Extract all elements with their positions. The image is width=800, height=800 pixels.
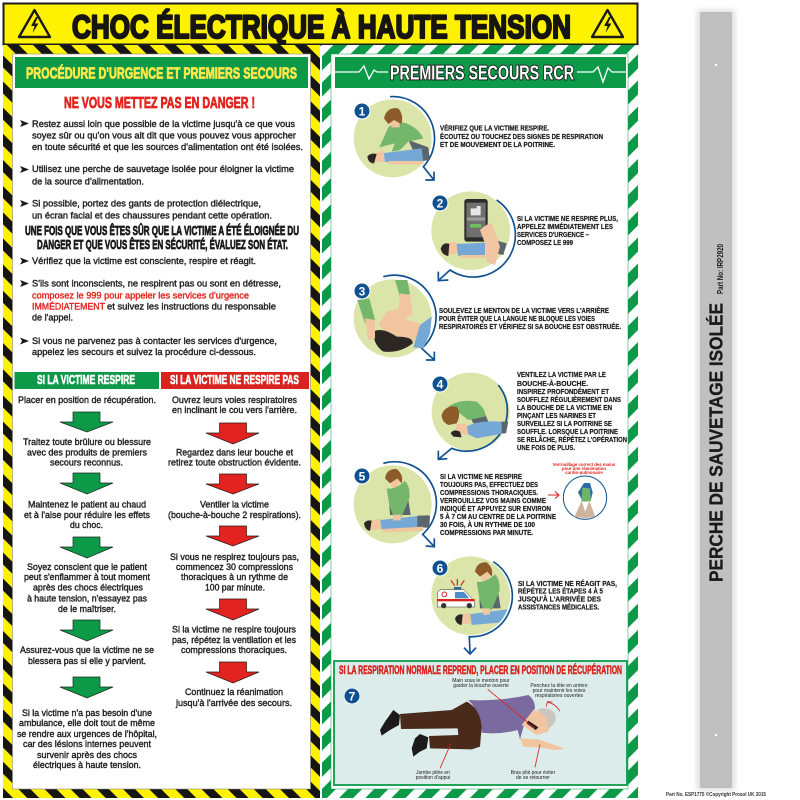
bullet list: assessment: de l'appel. <box>32 313 73 323</box>
steps text: breathing: avec des produits de premiers <box>27 448 147 458</box>
text 5 <box>440 472 556 537</box>
text 4: SE RELÂCHE, RÉPÉTEZ L'OPÉRATION <box>517 435 627 444</box>
callouts: de se retourner <box>516 775 550 781</box>
icon: right electrical warning triangle <box>592 10 623 37</box>
text 3: SOULEVEZ LE MENTON DE LA VICTIME VERS L'ARRIÈRE <box>439 306 609 315</box>
steps text: breathing: Traitez toute brûlure ou blessure <box>23 437 151 447</box>
steps text: breathing: secours reconnus. <box>50 458 123 468</box>
step 3 <box>354 275 621 360</box>
steps text: breathing: Maintenez le patient au chaud <box>28 500 146 510</box>
step 5 <box>354 462 616 547</box>
assessment heading <box>25 223 299 252</box>
step 7: recovery position <box>334 661 627 785</box>
bullet list: assessment: IMMÉDIATEMENT <box>32 301 105 311</box>
text 6: RÉPÉTEZ LES ÉTAPES 4 À 5 <box>518 586 603 596</box>
text 2: SERVICES D'URGENCE – <box>517 230 589 239</box>
step 1 <box>354 97 603 180</box>
arrows: red flow <box>206 423 259 683</box>
badge 1 <box>354 103 370 119</box>
text 2: COMPOSEZ LE 999 <box>517 238 573 247</box>
tab: not breathing <box>161 372 309 389</box>
steps text: not breathing: thoraciques à un rythme de <box>181 572 288 582</box>
text 6: JUSQU'À L'ARRIVÉE DES <box>518 594 601 604</box>
steps text: breathing <box>17 395 157 770</box>
inset caption: pour une réanimation <box>562 466 606 471</box>
steps text: breathing: Soyez conscient que le patient <box>27 562 147 572</box>
illustration: recovery position <box>380 689 564 768</box>
panel: emergency procedure <box>3 45 320 798</box>
bullet list: assessment: Vérifiez que la victime est consciente, respire et réagit. <box>32 256 256 266</box>
text 6: ASSISTANCES MÉDICALES. <box>518 602 599 612</box>
badge 7: 7 <box>349 689 356 703</box>
bullet list: assessment: Si vous ne parvenez pas à contacter les services d'urgence, <box>32 336 277 346</box>
steps text: breathing: du choc. <box>70 520 103 530</box>
badge 1: 1 <box>359 104 366 118</box>
steps text: not breathing: jusqu'à l'arrivée des secours. <box>175 698 292 708</box>
text 2: APPELEZ IMMÉDIATEMENT LES <box>517 222 613 231</box>
text 5: COMPRESSIONS PAR MINUTE. <box>440 528 533 537</box>
insulated pole strip <box>697 10 735 790</box>
step 4 <box>432 370 627 459</box>
text 4: VENTILEZ LA VICTIME PAR LE <box>517 370 606 379</box>
callouts: garder la bouche ouverte <box>453 683 509 689</box>
panel: CPR first aid <box>322 45 638 798</box>
bullet list: first steps: Utilisez une perche de sauvetage isolée pour éloigner la victime <box>32 164 294 174</box>
steps text: breathing: et à l'aise pour réduire les effets <box>24 510 150 520</box>
text 4: INSPIREZ PROFONDÉMENT ET <box>517 387 610 396</box>
badge 5: 5 <box>359 469 366 483</box>
bullet list: first steps: Si possible, portez des gants de protection diélectrique, <box>32 199 261 209</box>
pole part number: Part No: IRP2920 <box>715 244 725 294</box>
bullet list: first steps: Restez aussi loin que possible de la victime jusqu'à ce que vous <box>32 119 295 129</box>
illustration: chest compressions <box>354 462 436 547</box>
callouts: Penchez la tête en arrière <box>530 683 588 689</box>
bullet list: first steps: un écran facial et des chaussures pendant cette opération. <box>32 210 272 220</box>
badge 7 <box>344 688 360 704</box>
text 1: ET DE MOUVEMENT DE LA POITRINE. <box>440 140 555 149</box>
text 5: TOUJOURS PAS, EFFECTUEZ DES <box>440 480 538 489</box>
callouts: Main sous le menton pour <box>452 678 510 684</box>
callouts: respiratoires ouvertes <box>535 693 584 699</box>
illustration: repeat with ambulance <box>431 556 512 654</box>
inset caption <box>553 462 616 475</box>
inset caption: Verrouillage correct des mains <box>553 462 616 467</box>
icon: locked hands <box>563 476 607 519</box>
column: victim not breathing <box>161 372 309 708</box>
warning heading: NE VOUS METTEZ PAS EN DANGER ! <box>64 95 255 112</box>
illustration: mouth to mouth <box>432 373 510 459</box>
bullet list: assessment: composez le 999 pour appeler les services d'urgence <box>32 290 249 300</box>
steps text: not breathing: Continuez la réanimation <box>185 687 283 697</box>
text 3 <box>439 306 621 331</box>
steps text: not breathing: Ventiler la victime <box>200 500 269 510</box>
illustration: call emergency <box>431 191 515 281</box>
pole label: PERCHE DE SAUVETAGE ISOLÉE <box>706 303 727 582</box>
text 4: UNE FOIS DE PLUS. <box>517 443 575 452</box>
badge 3 <box>354 283 370 299</box>
arrow: to inset <box>548 492 559 498</box>
heading: CPR <box>335 57 626 88</box>
bullet list: first steps: en toute sécurité et que les sources d'alimentation ont été isolées. <box>32 142 303 152</box>
column: victim breathing <box>14 372 159 770</box>
callouts: pour maintenir les voies <box>533 688 586 694</box>
bullet list: assessment: appelez les secours et suivez la procédure ci-dessous. <box>32 347 256 357</box>
illustration: check breathing <box>354 97 435 180</box>
steps text: breathing: car des lésions internes peuvent <box>23 739 151 749</box>
inset: hand position <box>548 462 616 519</box>
badge 4 <box>432 376 448 392</box>
text 5: 5 À 7 CM AU CENTRE DE LA POITRINE <box>440 512 556 521</box>
badge 5 <box>354 468 370 484</box>
steps text: not breathing: Si la victime ne respire toujours <box>172 625 296 635</box>
steps text: not breathing: 100 par minute. <box>205 583 265 593</box>
text 5: COMPRESSIONS THORACIQUES. <box>440 488 538 497</box>
step 6 <box>431 556 617 654</box>
text 5: VERROUILLEZ VOS MAINS COMME <box>440 496 546 505</box>
bullet list: assessment <box>20 256 281 357</box>
arrows: green flow <box>60 412 113 698</box>
text 2: SI LA VICTIME NE RESPIRE PLUS, <box>517 214 618 223</box>
badge 6: 6 <box>437 561 444 575</box>
text 6 <box>518 579 617 612</box>
icon: left electrical warning triangle <box>19 10 50 37</box>
steps text: not breathing: commencez 30 compressions <box>176 562 293 572</box>
steps text: breathing: blessera pas si elle y parvient. <box>28 656 146 666</box>
bullet list: first steps: de la source d'alimentation. <box>32 176 144 186</box>
recovery heading: SI LA RESPIRATION NORMALE REPREND, PLACER EN POSITION DE RÉCUPÉRATION <box>339 664 622 677</box>
heading: CPR: PREMIERS SECOURS RCR <box>390 62 574 84</box>
steps text: not breathing: Ouvrez leurs voies respiratoires <box>172 395 297 405</box>
text 3: POUR ÉVITER QUE LA LANGUE NE BLOQUE LES VOIES <box>439 314 595 323</box>
tab: not breathing: SI LA VICTIME NE RESPIRE PAS <box>170 372 299 387</box>
steps text: breathing: survenir après des chocs <box>37 750 137 760</box>
steps text: breathing: Si la victime n'a pas besoin d'une <box>22 708 152 718</box>
text 5: SI LA VICTIME NE RESPIRE <box>440 472 522 481</box>
text 2 <box>517 214 618 247</box>
badge 6 <box>432 560 448 576</box>
steps text: not breathing: Si vous ne respirez toujours pas, <box>170 552 299 562</box>
heading: procedure <box>15 57 308 88</box>
title text: CHOC ÉLECTRIQUE À HAUTE TENSION <box>72 8 571 45</box>
steps text: breathing: peut s'enflammer à tout moment <box>24 572 150 582</box>
text 4: BOUCHE-À-BOUCHE. <box>517 379 588 388</box>
footer credit: Part No. ESP1775 ©Copyright Prosol UK 2015 <box>666 791 766 798</box>
steps text: breathing: ambulance, elle doit tout de même <box>19 718 155 728</box>
bullet list: first steps <box>20 119 303 220</box>
title banner <box>4 4 638 45</box>
callouts: Bras plié pour éviter <box>511 770 556 776</box>
steps text: breathing: après des chocs électriques <box>33 583 143 593</box>
badge 2 <box>432 195 448 211</box>
steps text: not breathing: retirez toute obstruction évidente. <box>168 458 301 468</box>
text 6: SI LA VICTIME NE RÉAGIT PAS, <box>518 579 617 588</box>
tab: breathing: SI LA VICTIME RESPIRE <box>37 372 135 387</box>
tab: breathing <box>14 372 159 389</box>
heading: procedure: PROCÉDURE D'URGENCE ET PREMIERS SECOURS <box>26 64 297 82</box>
text 4: SOUFFLEZ RÉGULIÈREMENT DANS <box>517 395 621 404</box>
steps text: breathing: de le maîtriser. <box>58 604 116 614</box>
text 4: PINÇANT LES NARINES ET <box>517 411 597 420</box>
text 4 <box>517 370 627 452</box>
text 3: RESPIRATOIRES ET VÉRIFIEZ SI SA BOUCHE EST OBSTRUÉE. <box>439 322 621 331</box>
steps text: breathing: Placer en position de récupération. <box>18 395 156 405</box>
text 1 <box>440 124 603 149</box>
badge 4: 4 <box>437 377 444 391</box>
assessment heading: DANGER ET QUE VOUS ÊTES EN SÉCURITÉ, ÉVALUEZ SON ÉTAT. <box>37 237 288 252</box>
text 4: SURVEILLEZ SI LA POITRINE SE <box>517 419 612 428</box>
steps text: breathing: à haute tension, n'essayez pas <box>27 594 147 604</box>
bullet list: assessment: et suivez les instructions du responsable <box>107 301 276 311</box>
steps text: not breathing: (bouche-à-bouche 2 respirations). <box>168 510 301 520</box>
steps text: not breathing: pas, répétez la ventilation et les <box>172 635 296 645</box>
text 4: LA BOUCHE DE LA VICTIME EN <box>517 403 612 412</box>
steps text: not breathing: en inclinant le cou vers l'arrière. <box>172 405 297 415</box>
steps text: breathing: se rendre aux urgences de l'hôpital, <box>17 729 157 739</box>
steps text: not breathing: compressions thoraciques. <box>181 645 287 655</box>
callouts <box>416 678 588 781</box>
bullet list: first steps: soyez sûr ou qu'on vous ait dit que vous pouvez vous approcher <box>32 130 296 140</box>
illustration: tilt head <box>354 275 436 360</box>
text 5: 30 FOIS, À UN RYTHME DE 100 <box>440 520 535 529</box>
steps text: not breathing <box>168 395 301 708</box>
step 2 <box>431 191 618 281</box>
text 5: INDIQUÉ ET APPUYEZ SUR ENVIRON <box>440 504 551 513</box>
text 1: ÉCOUTEZ OU TOUCHEZ DES SIGNES DE RESPIRATION <box>440 132 603 141</box>
steps text: breathing: électriques à haute tension. <box>33 760 141 770</box>
callouts: Jambe pliée en <box>416 770 450 776</box>
callouts: position d'appui <box>416 775 450 781</box>
bullet list: assessment: S'ils sont inconscients, ne respirent pas ou sont en détresse, <box>32 279 281 289</box>
steps text: breathing: Assurez-vous que la victime ne se <box>20 645 154 655</box>
steps text: not breathing: Regardez dans leur bouche et <box>176 448 293 458</box>
badge 3: 3 <box>359 284 366 298</box>
text 1: VÉRIFIEZ QUE LA VICTIME RESPIRE. <box>440 124 549 133</box>
badge 2: 2 <box>437 196 444 210</box>
inset caption: cardio-pulmonaire <box>565 470 603 475</box>
assessment heading: UNE FOIS QUE VOUS ÊTES SÛR QUE LA VICTIME A ÉTÉ ÉLOIGNÉE DU <box>25 223 299 238</box>
text 4: SOUFFLE. LORSQUE LA POITRINE <box>517 427 618 436</box>
